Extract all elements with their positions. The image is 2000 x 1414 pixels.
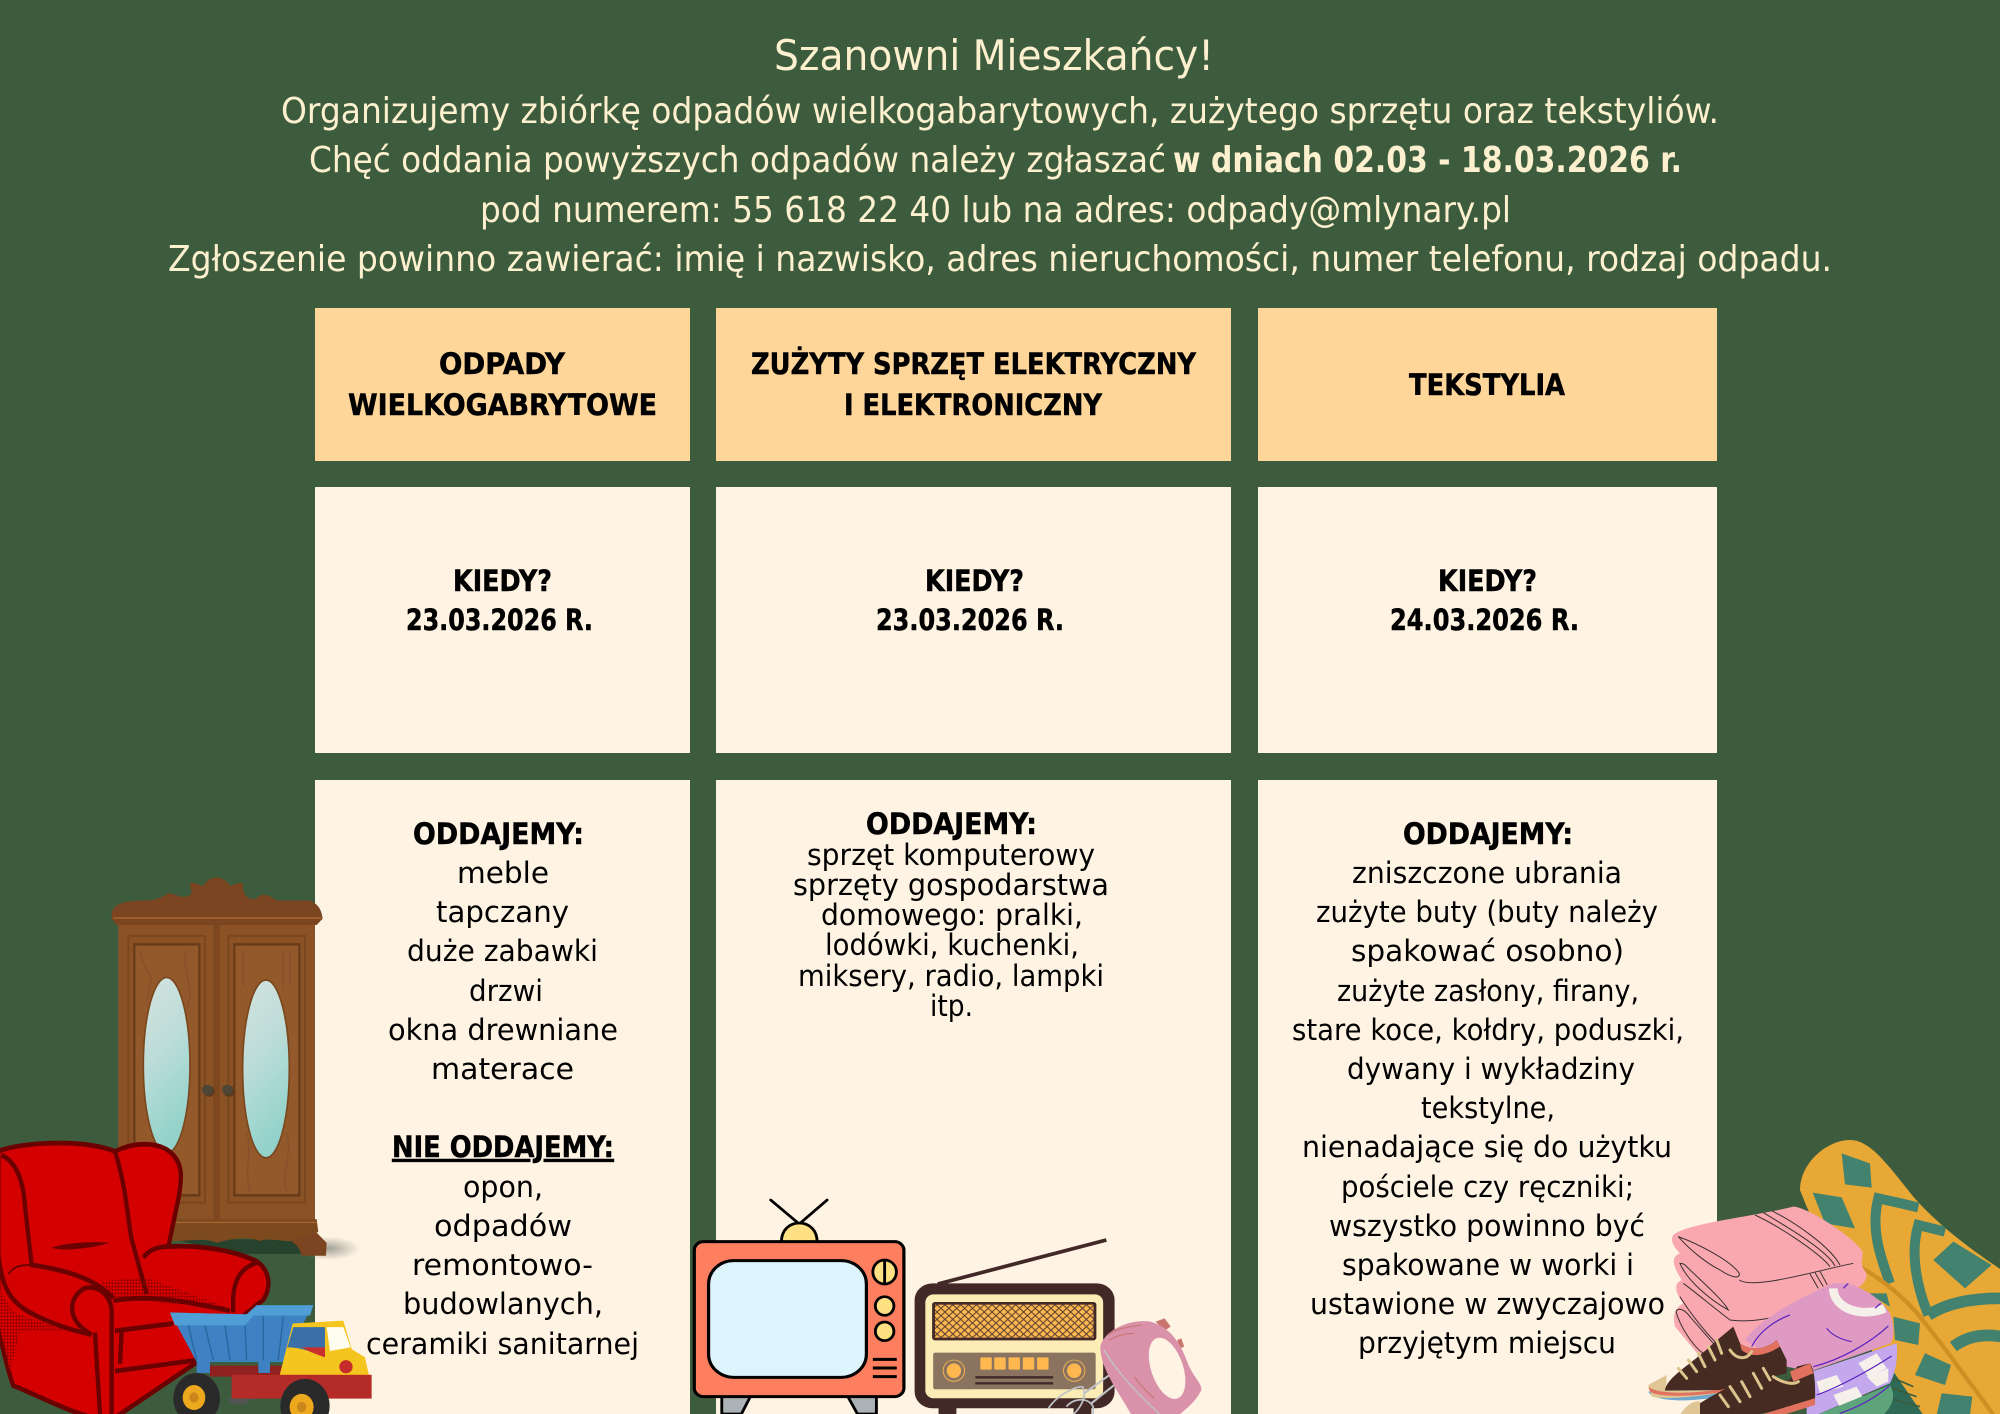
panel: when column 3 [1258,487,1717,753]
panel: accepted items column 2: lodówki, kuchenki, [825,928,1079,962]
panel: accepted items column 3: nienadające się do użytku [1302,1130,1672,1164]
panel: when column 2 [716,487,1231,753]
panel: accepted items column 2: ODDAJEMY: [866,807,1037,841]
icon: red armchair [0,1143,268,1414]
panel: accepted items column 3 [1258,780,1717,1414]
panel: column 1 title: WIELKOGABRYTOWE [348,388,657,422]
panel: column 1 title [315,308,690,461]
panel: accepted items column 1: tapczany [436,895,569,929]
panel: accepted items column 1: ODDAJEMY: [413,817,584,851]
panel: accepted items column 1: NIE ODDAJEMY: [392,1130,614,1164]
panel: column 2 title: I ELEKTRONICZNY [844,388,1103,422]
panel: accepted items column 3: dywany i wykładziny [1347,1052,1635,1086]
intro line: Organizujemy zbiórkę odpadów wielkogabarytowych, zużytego sprzętu oraz tekstyliów. [281,91,1719,132]
panel: accepted items column 1: meble [457,856,549,890]
panel: accepted items column 1: budowlanych, [403,1287,603,1321]
panel: when column 1 [315,487,690,753]
panel: when column 1: KIEDY? [453,564,552,598]
panel: accepted items column 3: pościele czy ręczniki; [1341,1170,1634,1204]
panel: accepted items column 3: ustawione w zwyczajowo [1310,1287,1665,1321]
panel: accepted items column 3: tekstylne, [1421,1091,1555,1125]
icon: toy dump truck [170,1305,372,1414]
panel: accepted items column 1 [315,780,690,1414]
icon: pink hand mixer [1049,1318,1201,1414]
greeting: Szanowni Mieszkańcy! [774,31,1214,80]
icon: folded clothes [1745,1283,1897,1414]
panel: accepted items column 3: zużyte zasłony, firany, [1337,974,1639,1008]
icon: sneakers [1648,1327,1815,1414]
header text [168,31,1832,280]
panel: accepted items column 1: drzwi [469,974,543,1008]
panel: when column 3: 24.03.2026 R. [1390,603,1579,637]
panel: column 2 title [716,308,1231,461]
panel: column 3 title [1258,308,1717,461]
panel: accepted items column 1: remontowo- [412,1248,593,1282]
panel: accepted items column 2: sprzęty gospodarstwa [793,868,1109,902]
icon: patterned blanket [1800,1140,2000,1414]
panel: accepted items column 3: spakować osobno) [1351,934,1624,968]
panel: accepted items column 2: sprzęt komputerowy [807,838,1095,872]
panel: accepted items column 3: zniszczone ubrania [1352,856,1622,890]
panel: accepted items column 1: materace [431,1052,574,1086]
icon: retro radio [915,1240,1115,1414]
icon: retro television [694,1200,904,1414]
panel: accepted items column 3: przyjętym miejscu [1358,1326,1616,1360]
panel: accepted items column 3: spakowane w worki i [1342,1248,1634,1282]
deadline line: Chęć oddania powyższych odpadów należy zgłaszać [309,140,1166,181]
icon: wardrobe [112,877,360,1260]
panel: accepted items column 2: miksery, radio, lampki [798,959,1104,993]
panel: column 3 title: TEKSTYLIA [1409,368,1565,402]
icon: towels [1672,1207,1867,1360]
panel: accepted items column 1: odpadów [434,1209,572,1243]
panel: accepted items column 3: wszystko powinno być [1329,1209,1645,1243]
panel: when column 1: 23.03.2026 R. [406,603,593,637]
panel: column 1 title: ODPADY [439,347,566,381]
panel: when column 2: 23.03.2026 R. [876,603,1064,637]
panel: accepted items column 3: stare koce, kołdry, poduszki, [1292,1013,1684,1047]
panel: accepted items column 2: itp. [930,989,973,1023]
panel: accepted items column 3: ODDAJEMY: [1403,817,1573,851]
panel: accepted items column 2: domowego: pralki, [821,898,1083,932]
requirements line: Zgłoszenie powinno zawierać: imię i nazwisko, adres nieruchomości, numer telefonu, rodzaj odpadu. [168,239,1832,280]
panel: accepted items column 3: zużyte buty (buty należy [1316,895,1658,929]
panel: when column 3: KIEDY? [1438,564,1537,598]
panel: accepted items column 1: duże zabawki [407,934,598,968]
panel: accepted items column 1: okna drewniane [388,1013,618,1047]
panel: accepted items column 2 [716,780,1231,1414]
panel: accepted items column 1: opon, [463,1170,543,1204]
contact line: pod numerem: 55 618 22 40 lub na adres: odpady@mlynary.pl [480,190,1511,231]
panel: accepted items column 1: ceramiki sanitarnej [366,1327,639,1361]
panel: column 2 title: ZUŻYTY SPRZĘT ELEKTRYCZNY [751,347,1197,381]
deadline dates: w dniach 02.03 - 18.03.2026 r. [1173,140,1682,181]
panel: when column 2: KIEDY? [925,564,1024,598]
